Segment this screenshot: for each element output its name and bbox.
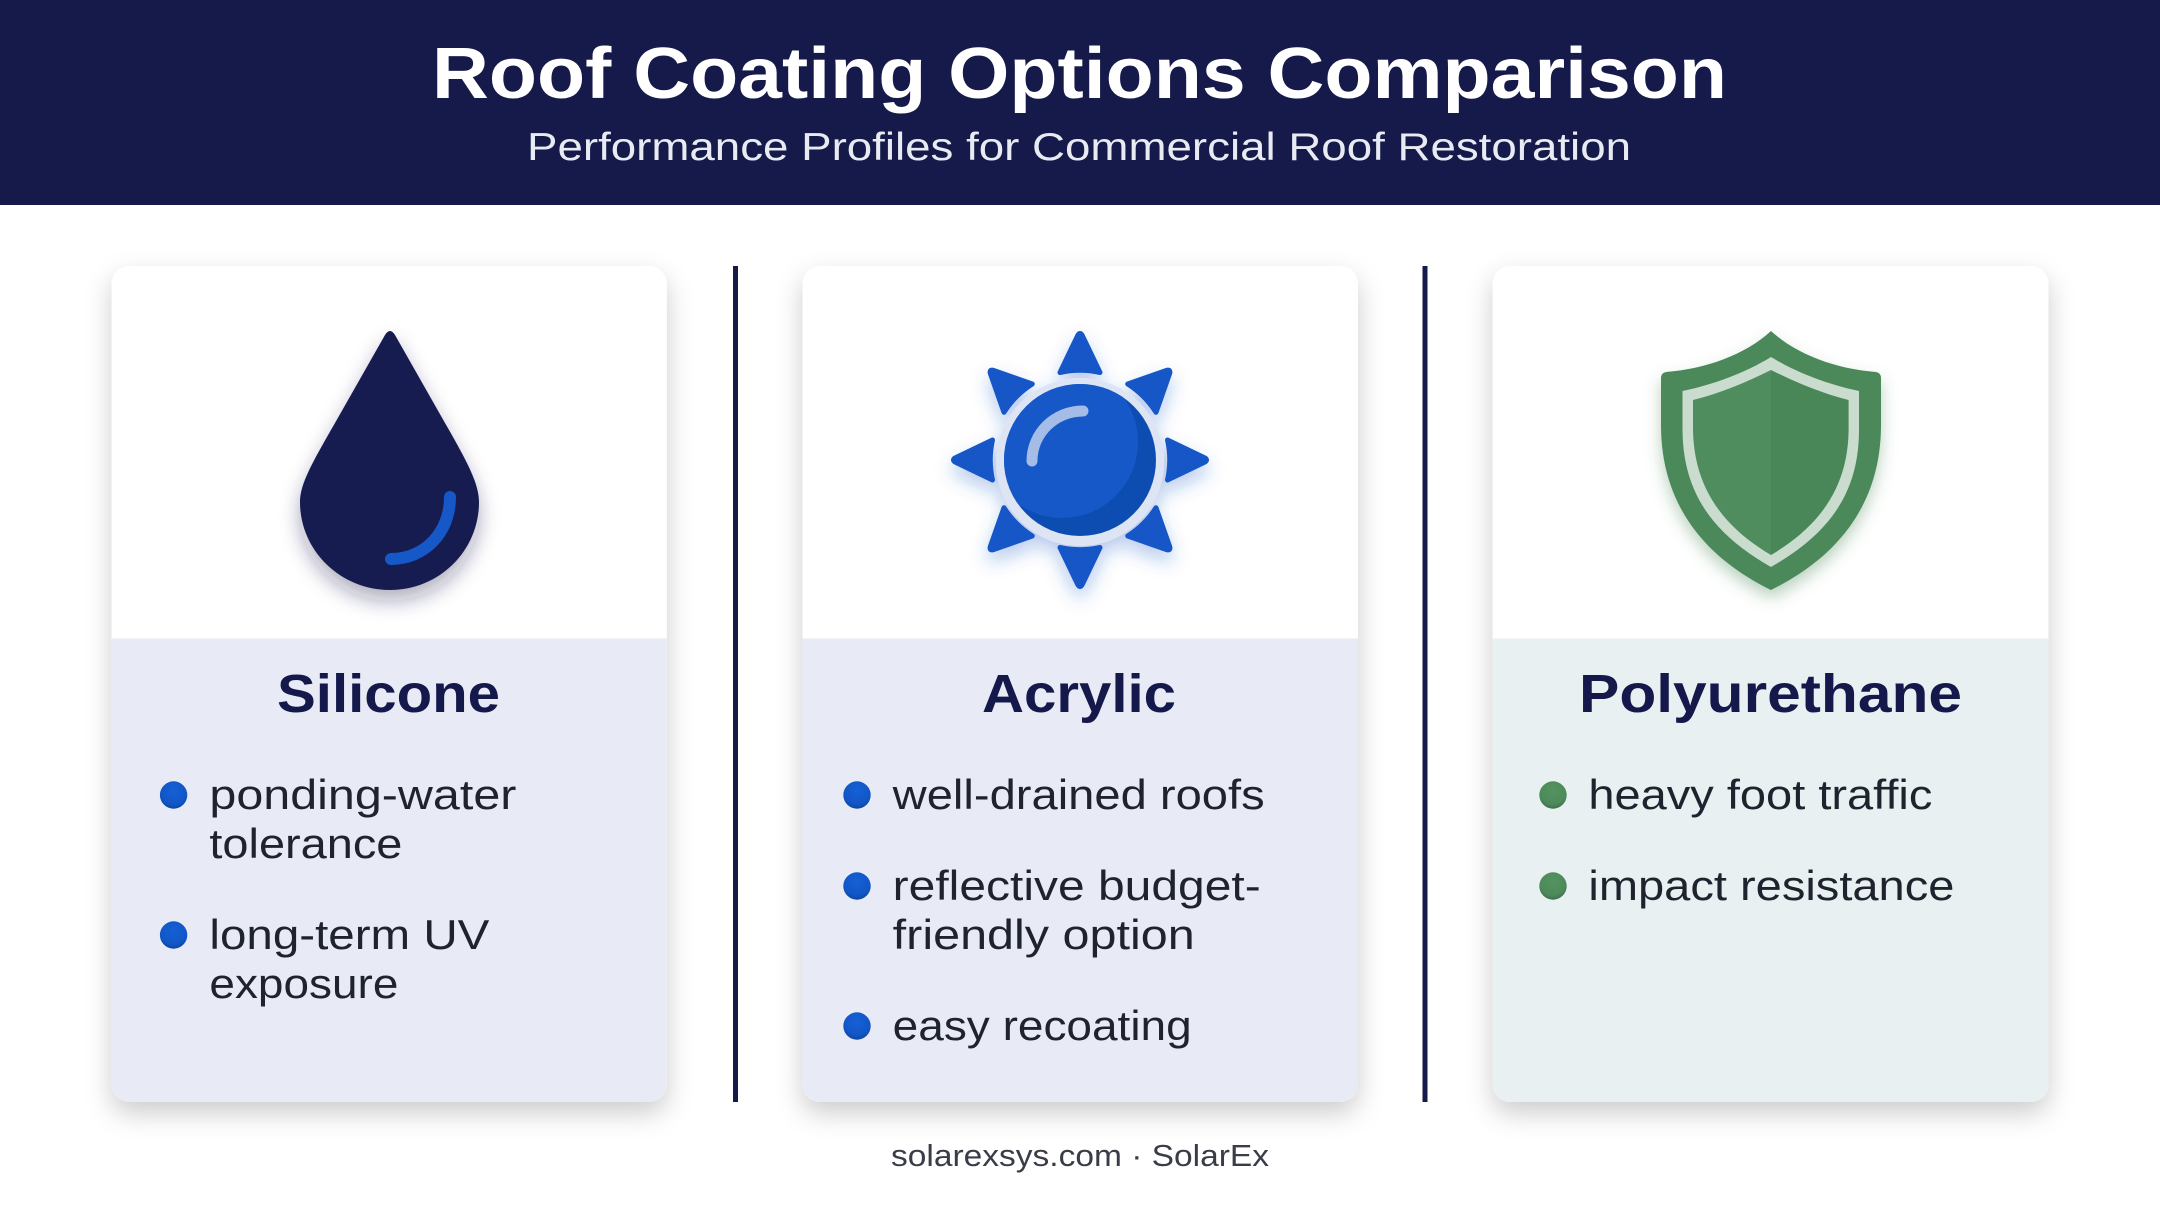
- bullet: ponding-water tolerance: ponding-water: [209, 771, 516, 818]
- icon: sun: [954, 334, 1206, 586]
- heading: Silicone: Silicone: [277, 664, 500, 724]
- subtitle: Performance Profiles for Commercial Roof Restoration: [527, 126, 1631, 169]
- icon: water drop: [300, 331, 479, 590]
- title: Roof Coating Options Comparison: [432, 34, 1727, 114]
- bullet: long-term UV exposure: [160, 911, 489, 1007]
- heading: Acrylic: Acrylic: [982, 664, 1176, 724]
- bullet: impact resistance: impact resistance: [1588, 862, 1954, 909]
- panel: silicone: [112, 266, 667, 1102]
- card background: [112, 266, 667, 1102]
- panel: acrylic: [802, 266, 1358, 1102]
- heading: Polyurethane: Polyurethane: [1579, 664, 1962, 724]
- card background: [1493, 266, 2048, 1102]
- bullet: reflective budget-friendly option: friendly option: [893, 911, 1195, 958]
- bullet: reflective budget-friendly option: reflective budget-: [893, 862, 1261, 909]
- bullet: long-term UV exposure: long-term UV: [209, 911, 489, 958]
- header banner: [0, 0, 2160, 205]
- bullet: reflective budget-friendly option: [843, 862, 1261, 958]
- bullet: heavy foot traffic: heavy foot traffic: [1588, 771, 1932, 818]
- footer credit: solarexsys.com · SolarEx: [891, 1138, 1270, 1173]
- icon: shield: [1661, 331, 1881, 590]
- panel: polyurethane: [1493, 266, 2048, 1102]
- bullet: ponding-water tolerance: tolerance: [209, 820, 402, 867]
- bullet: long-term UV exposure: exposure: [209, 960, 398, 1007]
- bullet: easy recoating: easy recoating: [893, 1002, 1192, 1049]
- bullet: well-drained roofs: well-drained roofs: [892, 771, 1265, 818]
- card background: [802, 266, 1358, 1102]
- bullet: ponding-water tolerance: [160, 771, 516, 867]
